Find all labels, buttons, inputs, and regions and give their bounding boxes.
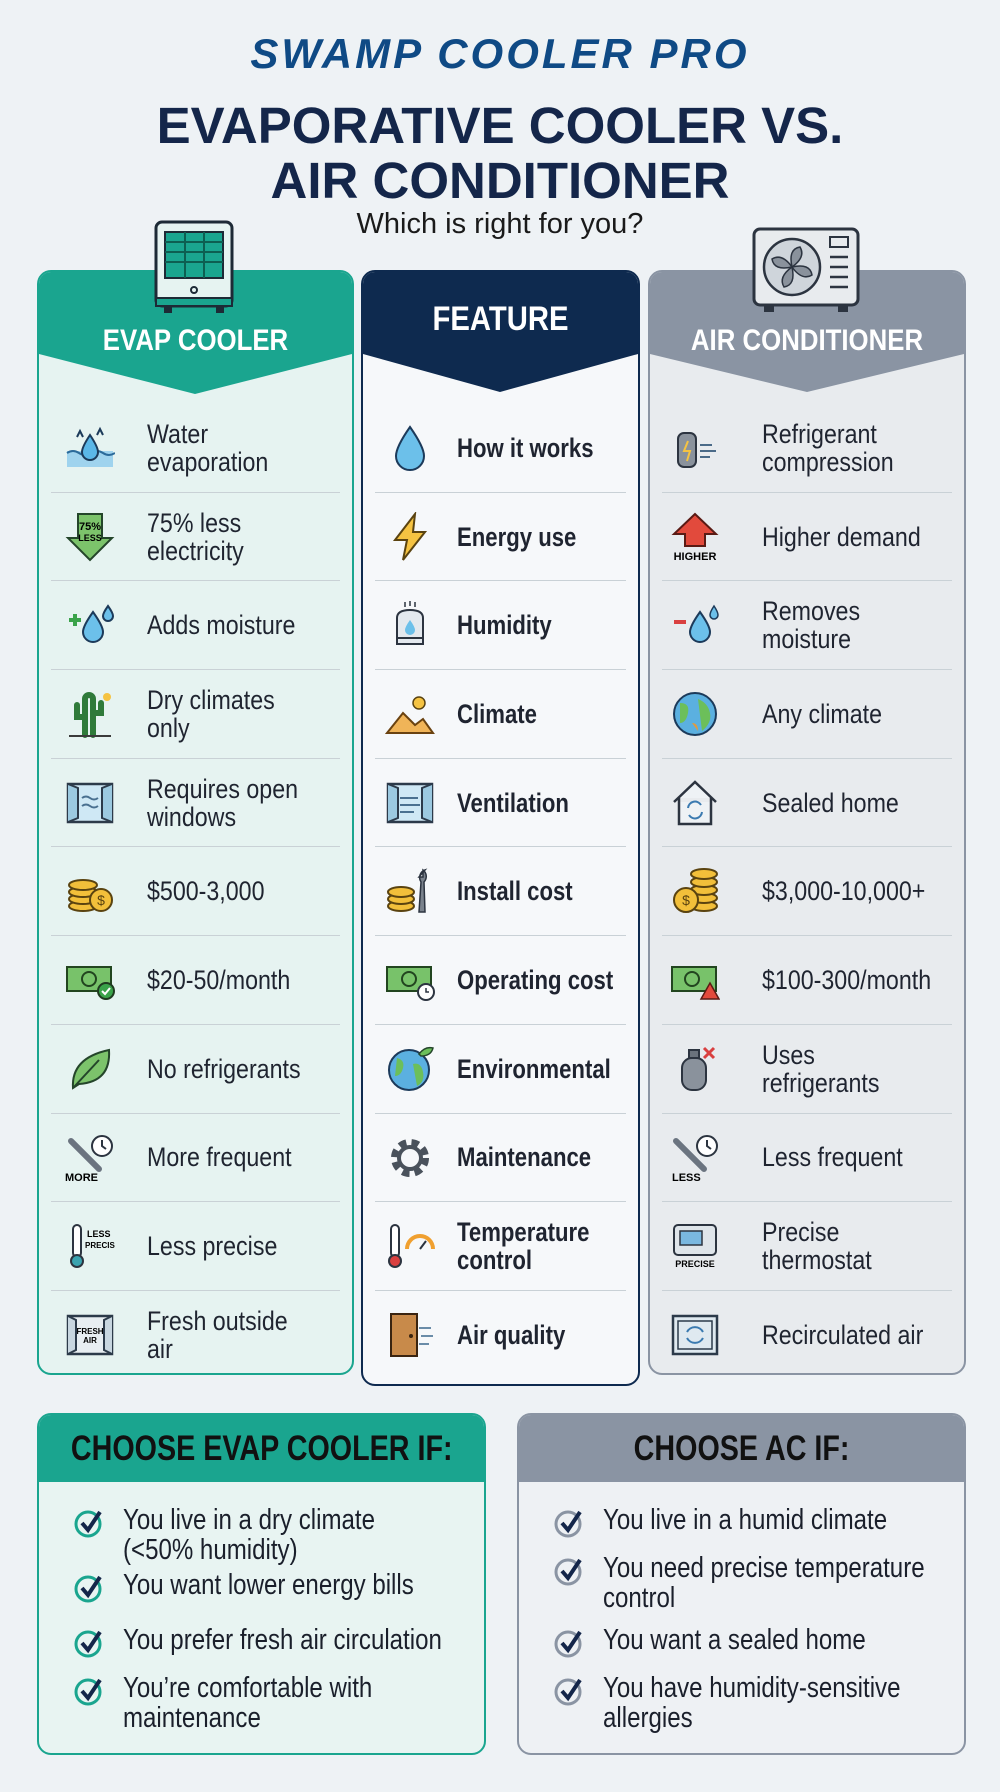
row: precise thermostat: Precise [762,1217,839,1247]
row: humidity [375,581,626,670]
row: 75% less electricity: electricity [147,536,244,566]
row: uses refrigerants [662,1025,952,1114]
row: ventilation: Ventilation [457,788,569,818]
row: removes moisture: moisture [762,624,851,654]
row: install cost: $500-3,000 [147,876,264,906]
row: humidity: Humidity [457,610,552,640]
row: climate: Climate [457,699,537,729]
main heading [157,97,843,209]
heading: air conditioner: AIR CONDITIONER [691,324,923,357]
row: fresh outside air [66,1306,288,1364]
row: fresh outside air: air [147,1334,173,1364]
row: temperature control: Temperature [457,1217,589,1247]
row: 75% less electricity: LESS [78,533,102,543]
panel: choose AC if: You want a sealed home [603,1624,866,1656]
row: precise thermostat: thermostat [762,1245,872,1275]
row: adds moisture [51,581,340,670]
row: sealed home [662,759,952,847]
brand title: SWAMP COOLER PRO [250,30,750,77]
row: install cost [662,847,952,936]
main heading: EVAPORATIVE COOLER VS. [157,97,843,154]
row: precise thermostat [662,1202,952,1291]
row: sealed home: Sealed home [762,788,899,818]
panel: choose evap cooler if: You prefer fresh air circulation [123,1624,442,1656]
panel: evap cooler column [37,270,354,1375]
row: dry climates only: only [147,713,190,743]
row: uses refrigerants: refrigerants [762,1068,879,1098]
row: removes moisture [662,581,952,670]
row: precise thermostat: PRECISE [675,1259,715,1269]
row: no refrigerants [51,1025,340,1114]
row: install cost: $3,000-10,000+ [762,876,925,906]
row: 75% less electricity: 75% less [147,508,241,538]
row: install cost [51,847,340,936]
row: recirculated air: Recirculated air [762,1320,923,1350]
row: how it works [375,404,626,493]
bullet list: ac reasons [554,1504,925,1734]
panel: feature column [361,270,640,1386]
icon: evaporative cooler unit [154,220,234,313]
row: water evaporation [51,404,340,493]
row: environmental [375,1025,626,1114]
row: water evaporation: evaporation [147,447,268,477]
icon: AC outdoor unit [752,228,860,312]
row: higher demand [662,493,952,581]
row: operating cost [662,936,952,1025]
row: energy use [375,493,626,581]
panel: choose AC if: You have humidity-sensitive [603,1672,900,1704]
panel: choose evap cooler if: You want lower energy bills [123,1569,414,1601]
row: fresh outside air: FRESH [76,1327,104,1336]
row: less frequent maintenance: Less frequent [762,1142,903,1172]
row: water evaporation: Water [147,419,208,449]
row: install cost: $ [682,892,690,908]
panel: choose evap cooler if: You’re comfortable with [123,1672,372,1704]
row: environmental: Environmental [457,1054,611,1084]
subtitle: Which is right for you? [357,208,643,240]
row: how it works: How it works [457,433,594,463]
row: air quality [390,1313,566,1357]
heading: choose ac [519,1415,964,1482]
row: air quality: Air quality [457,1320,565,1350]
row: less precise [51,1202,340,1291]
panel: choose evap cooler if [37,1413,486,1755]
panel: choose evap cooler if: maintenance [123,1702,261,1734]
panel: choose AC if: You live in a humid climate [603,1504,887,1536]
panel: choose evap cooler if: (<50% humidity) [123,1534,298,1566]
row: dry climates only [51,670,340,759]
row: requires open windows: Requires open [147,774,298,804]
row: refrigerant compression: Refrigerant [762,419,877,449]
panel: choose AC if: You need precise temperature [603,1552,925,1584]
row: operating cost: $20-50/month [147,965,290,995]
row: removes moisture: Removes [762,596,860,626]
heading: choose evap cooler: CHOOSE EVAP COOLER IF: [71,1428,452,1468]
row: any climate [662,670,952,759]
row: maintenance: Maintenance [457,1142,591,1172]
row: uses refrigerants: Uses [762,1040,815,1070]
row: any climate: Any climate [762,699,882,729]
row: refrigerant compression: compression [762,447,894,477]
row: less frequent maintenance [662,1114,952,1202]
panel: choose AC if: allergies [603,1702,693,1734]
panel: choose AC if: control [603,1582,675,1614]
main heading: AIR CONDITIONER [270,152,730,209]
row: higher demand: Higher demand [762,522,921,552]
row: install cost [375,847,626,936]
panel: air conditioner column [648,270,966,1375]
row: operating cost [375,936,626,1025]
row: maintenance [375,1114,626,1202]
row: fresh outside air: Fresh outside [147,1306,288,1336]
row: no refrigerants: No refrigerants [147,1054,301,1084]
row: refrigerant compression [662,404,952,493]
heading: feature: FEATURE [433,300,568,338]
heading: choose ac: CHOOSE AC IF: [634,1428,849,1468]
row: operating cost: $100-300/month [762,965,931,995]
row: temperature control [375,1202,626,1291]
row: temperature control: control [457,1245,532,1275]
row: more frequent maintenance [51,1114,340,1202]
panel: choose AC if [517,1413,966,1755]
row: operating cost: Operating cost [457,965,613,995]
bullet list: evap reasons [74,1504,442,1734]
row: requires open windows: windows [147,802,236,832]
row: requires open windows [51,759,340,847]
heading: choose evap cooler [39,1415,484,1482]
heading: evap cooler: EVAP COOLER [103,324,288,357]
row: dry climates only: Dry climates [147,685,275,715]
row: fresh outside air: AIR [83,1336,97,1345]
row: install cost: Install cost [457,876,573,906]
row: adds moisture: Adds moisture [147,610,295,640]
row: more frequent maintenance: More frequent [147,1142,292,1172]
row: 75% less electricity: 75% [79,521,101,533]
row: operating cost [51,936,340,1025]
row: climate [375,670,626,759]
row: less precise: LESS [87,1229,111,1239]
row: install cost: $ [97,892,105,908]
row: recirculated air [672,1314,923,1356]
panel: choose evap cooler if: You live in a dry climate [123,1504,375,1536]
row: less precise: Less precise [147,1231,277,1261]
row: ventilation [375,759,626,847]
row: 75% less electricity [51,493,340,581]
row: energy use: Energy use [457,522,576,552]
